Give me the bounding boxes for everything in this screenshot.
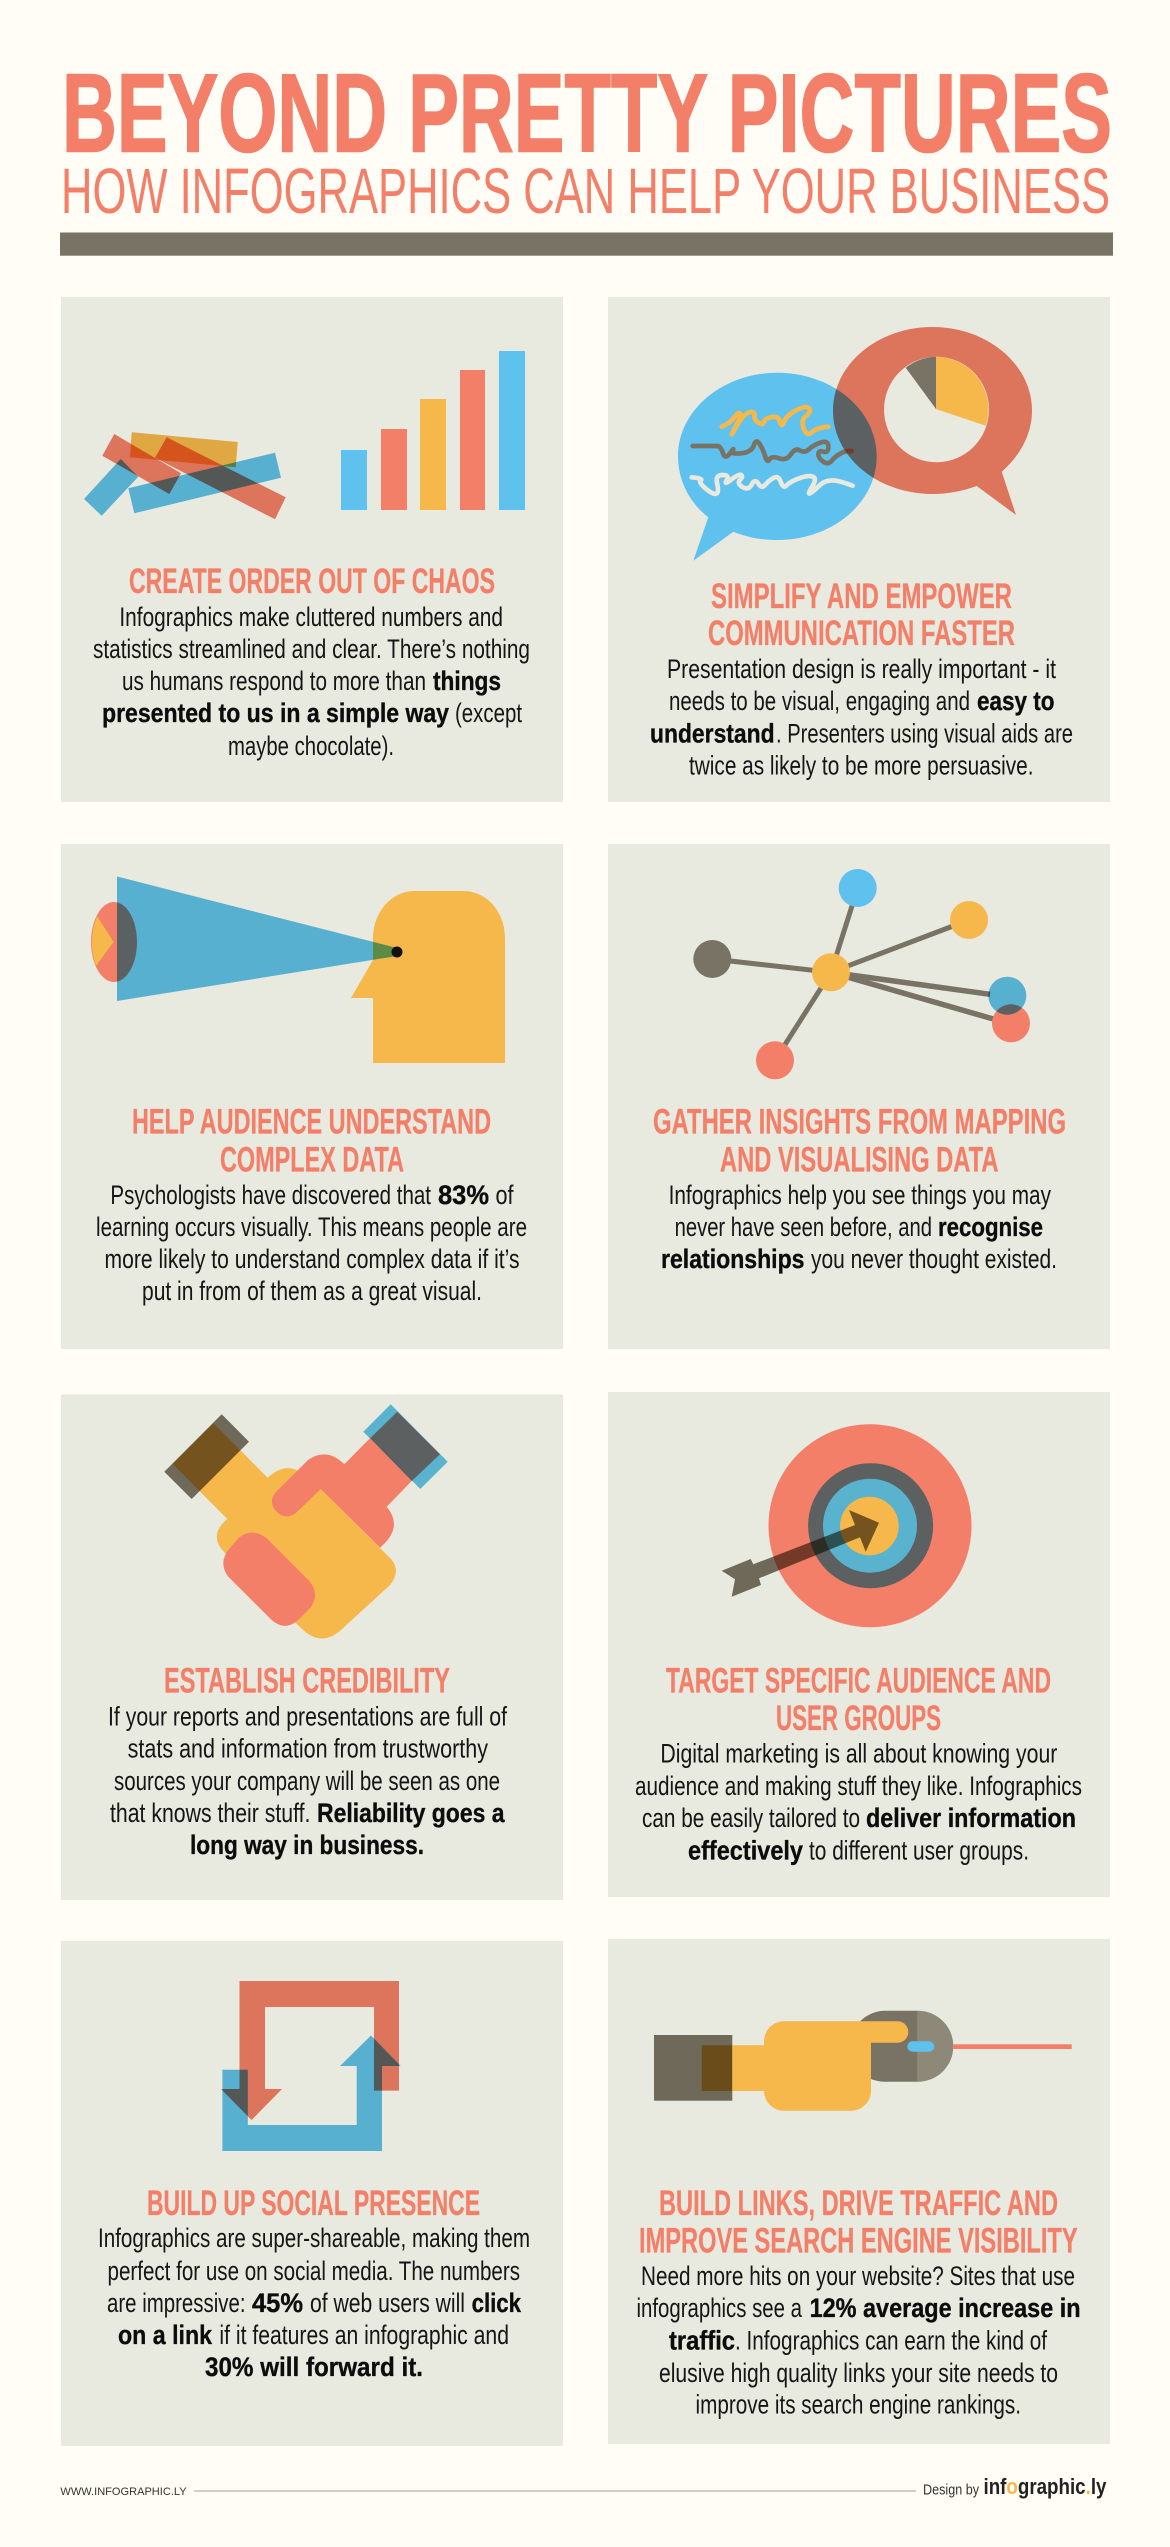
body text: if it features an infographic and [219,2320,509,2350]
body text: traffic [669,2326,735,2356]
heading [708,577,1015,653]
heading [653,1103,1066,1180]
body text: things [433,666,501,696]
body text: perfect for use on social media. The numbers [108,2256,520,2286]
heading: USER GROUPS [776,1699,941,1738]
body text: Infographics make cluttered numbers and [119,602,503,632]
heading: ESTABLISH CREDIBILITY [164,1662,450,1701]
icon: share arrows [221,1981,401,2151]
icon: eye viewing data [91,876,505,1063]
body text: click [472,2288,522,2318]
panel: gather insights [608,844,1110,1349]
body text: learning occurs visually. This means people are [96,1212,527,1242]
body text: If your reports and presentations are full of [108,1701,507,1731]
body text [650,654,1073,781]
body text: statistics streamlined and clear. There’s nothing [93,634,530,664]
panel: build links [608,1939,1110,2444]
body text [96,1180,527,1306]
body text: understand [650,719,775,749]
icon: chaos bars [84,432,286,519]
body text: (except [455,698,522,728]
body text: of web users will [310,2288,465,2318]
heading: BUILD UP SOCIAL PRESENCE [147,2184,480,2223]
footer credit [923,2474,1107,2499]
heading [639,2184,1078,2261]
chart: ordered bars [341,351,525,510]
heading: CREATE ORDER OUT OF CHAOS [129,562,495,601]
heading [132,1103,491,1180]
heading: COMPLEX DATA [220,1141,404,1180]
footer url: WWW.INFOGRAPHIC.LY [60,2486,187,2498]
icon: network nodes [693,869,1030,1079]
heading: SIMPLIFY AND EMPOWER [711,577,1012,616]
panel: establish credibility [61,1394,563,1900]
panel: help audience understand [61,844,563,1349]
body text: to different user groups. [809,1835,1029,1865]
body text: effectively [688,1835,803,1865]
body text: easy to [977,686,1054,716]
body text: recognise [938,1212,1043,1242]
body text: 45% [252,2288,303,2318]
body text: 30% will forward it. [205,2352,423,2382]
heading: HELP AUDIENCE UNDERSTAND [132,1103,491,1142]
icon: hand clicking mouse [654,2011,1072,2111]
body text: relationships [661,1244,804,1274]
body text [661,1180,1057,1274]
body text: 83% [438,1180,489,1210]
body text: Reliability goes a [317,1798,505,1828]
icon: handshake [164,1404,448,1638]
body text: . Presenters using visual aids are [776,719,1073,749]
body text: presented to us in a simple way [102,698,449,728]
body text: on a link [118,2320,213,2350]
footer credit: infographic.ly [984,2474,1107,2499]
panel: create order out of chaos [61,297,563,802]
body text: Infographics help you see things you may [669,1180,1051,1210]
heading: AND VISUALISING DATA [720,1141,998,1180]
body text: Infographics are super-shareable, making them [98,2223,530,2253]
icon: speech bubbles [678,327,1032,561]
body text: you never thought existed. [811,1244,1057,1274]
body text: Psychologists have discovered that [110,1180,431,1210]
header bar [60,232,1113,256]
body text [635,1739,1082,1865]
heading: COMMUNICATION FASTER [708,614,1015,653]
body text: us humans respond to more than [122,666,426,696]
body text: . Infographics can earn the kind of [735,2326,1047,2356]
heading [666,1662,1051,1738]
body text: needs to be visual, engaging and [669,686,970,716]
body text: never have seen before, and [675,1212,932,1242]
body text: deliver information [866,1803,1076,1833]
panel: simplify and empower [608,297,1110,802]
body text: can be easily tailored to [642,1803,860,1833]
body text [636,2261,1081,2420]
body text: put in from of them as a great visual. [142,1276,482,1306]
body text: 12% average increase in [810,2293,1081,2323]
body text: more likely to understand complex data if it’s [104,1244,520,1274]
body text [108,1701,507,1860]
body text: long way in business. [190,1830,424,1860]
body text: maybe chocolate). [228,731,394,761]
body text: of [496,1180,514,1210]
body text: Digital marketing is all about knowing your [660,1739,1057,1769]
body text: infographics see a [636,2293,803,2323]
body text [93,602,530,761]
body text: twice as likely to be more persuasive. [689,751,1034,781]
body text [98,2223,530,2382]
panel: build up social presence [61,1941,563,2446]
panel: target specific audience [608,1392,1110,1897]
footer credit: Design by [923,2481,979,2498]
body text: Presentation design is really important - it [667,654,1056,684]
icon: target and arrow [722,1424,972,1627]
body text: are impressive: [107,2288,246,2318]
body text: elusive high quality links your site needs to [659,2358,1058,2388]
body text: that knows their stuff. [110,1798,310,1828]
body text: sources your company will be seen as one [114,1766,500,1796]
body text: improve its search engine rankings. [696,2390,1021,2420]
body text: stats and information from trustworthy [128,1734,488,1764]
